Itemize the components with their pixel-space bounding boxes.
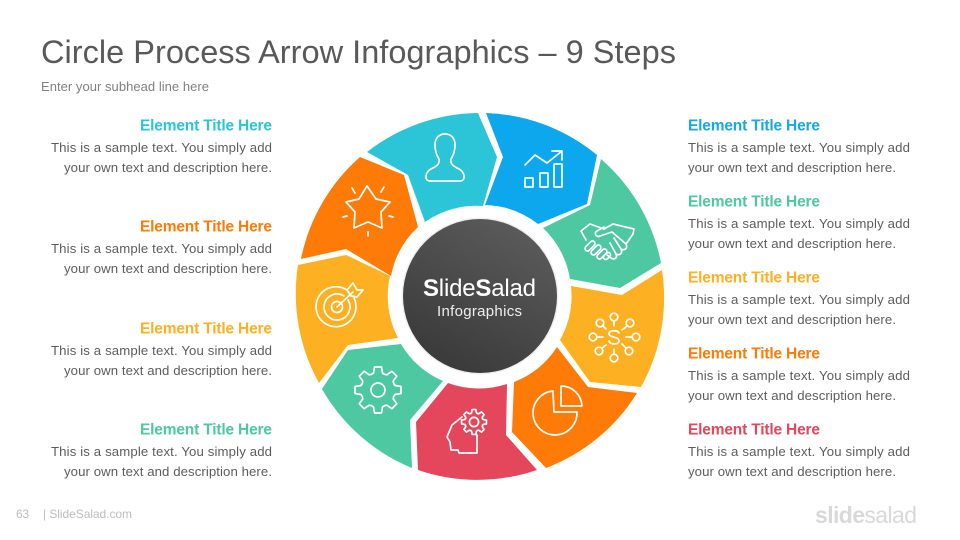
left text block 3 [51, 320, 272, 378]
icon: person [426, 134, 464, 181]
right text block 1: Element Title Here [688, 118, 820, 134]
right text block 5: your own text and description here. [688, 464, 896, 479]
left text block 1: your own text and description here. [64, 160, 272, 175]
right text block 2: Element Title Here [688, 194, 820, 210]
page number: 63 [16, 507, 29, 521]
segment: orange top left [301, 157, 418, 276]
right text block 1: your own text and description here. [688, 160, 896, 175]
icon: head with gear [447, 410, 486, 453]
left text block 4: This is a sample text. You simply add [51, 444, 272, 459]
left text block 3: your own text and description here. [64, 363, 272, 378]
left text block 3: Element Title Here [140, 320, 272, 338]
right text block 2: This is a sample text. You simply add [688, 216, 910, 231]
left text block 2: This is a sample text. You simply add [51, 241, 272, 256]
right text block 1: This is a sample text. You simply add [688, 140, 910, 155]
right text block 3 [688, 270, 910, 327]
left text block 4: your own text and description here. [64, 464, 272, 479]
hub sublabel: Infographics [437, 303, 522, 320]
right text block 5: Element Title Here [688, 422, 820, 438]
left text block 1 [51, 118, 272, 175]
right text block 1 [688, 118, 910, 175]
icon: target with arrow [316, 283, 363, 327]
subhead: Enter your subhead line here [41, 79, 209, 94]
title: Circle Process Arrow Infographics – 9 Steps [41, 34, 676, 70]
hub label: SlideSalad [423, 275, 536, 302]
left text block 1: Element Title Here [140, 118, 272, 134]
icon: pie chart [533, 386, 582, 435]
segment: yellow right [560, 270, 664, 387]
right text block 2: your own text and description here. [688, 236, 896, 251]
footer source: | SlideSalad.com [43, 507, 132, 521]
left text block 3: This is a sample text. You simply add [51, 343, 272, 358]
icon: growth chart [525, 151, 562, 187]
right text block 4: Element Title Here [688, 346, 820, 362]
left text block 4 [51, 422, 272, 479]
logo: slidesalad [815, 502, 917, 528]
right text block 4 [688, 346, 910, 403]
segment: orange bottom right [512, 347, 637, 468]
right text block 3: Element Title Here [688, 270, 820, 286]
icon: gear [355, 367, 401, 413]
right text block 3: your own text and description here. [688, 312, 896, 327]
left text block 2: your own text and description here. [64, 261, 272, 276]
right text block 2 [688, 194, 910, 251]
icon: handshake [581, 224, 634, 260]
segment: green right [543, 159, 661, 288]
left text block 2: Element Title Here [140, 218, 272, 236]
left text block 2 [51, 218, 272, 276]
right text block 3: This is a sample text. You simply add [688, 292, 910, 307]
center hub [402, 218, 558, 374]
right text block 5: This is a sample text. You simply add [688, 444, 910, 459]
left text block 1: This is a sample text. You simply add [51, 140, 272, 155]
icon: money network [589, 313, 640, 362]
segment: blue [485, 113, 597, 224]
segment: green left [322, 344, 443, 468]
segment: cyan [367, 113, 497, 222]
icon: star [343, 186, 393, 236]
right text block 4: your own text and description here. [688, 388, 896, 403]
segment: red [416, 383, 537, 480]
right text block 5 [688, 422, 910, 479]
left text block 4: Element Title Here [140, 422, 272, 438]
right text block 4: This is a sample text. You simply add [688, 368, 910, 383]
segment: yellow left [296, 255, 398, 383]
